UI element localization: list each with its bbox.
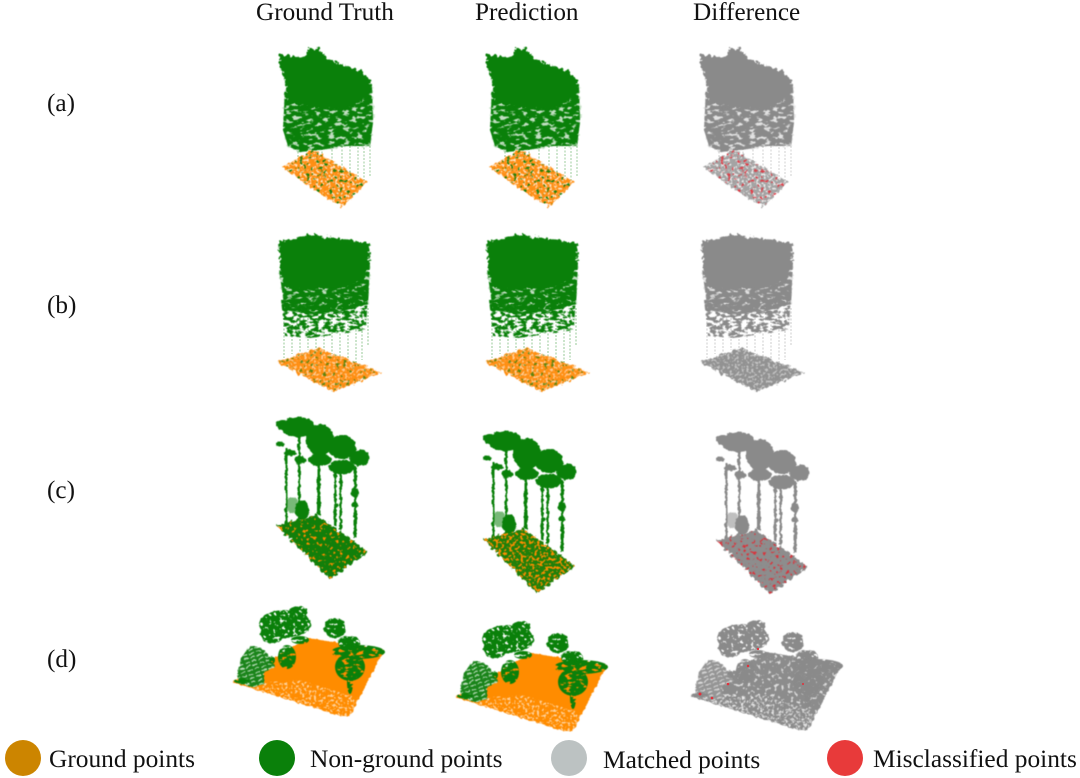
- row label (c): (c): [47, 477, 75, 504]
- row label (b): (b): [47, 292, 76, 319]
- legend item: ground points: [5, 740, 195, 776]
- legend: [5, 740, 1077, 776]
- point cloud: row a ground truth: [279, 48, 373, 206]
- legend item: non-ground points: Non-ground points: [310, 745, 503, 773]
- row label (a): (a): [47, 90, 75, 117]
- point cloud: row d difference: [690, 620, 843, 730]
- legend item: matched points: Matched points: [603, 746, 760, 774]
- point cloud: row c prediction: [483, 431, 577, 593]
- legend item: non-ground points: [259, 740, 503, 776]
- legend item: misclassified points: [827, 740, 1077, 776]
- point cloud: row d prediction: [455, 621, 608, 731]
- point cloud: row b prediction: [485, 234, 589, 392]
- point cloud: row a prediction: [486, 48, 580, 206]
- legend item: matched points: [551, 740, 760, 776]
- point cloud: row b ground truth: [277, 234, 381, 392]
- point cloud: row d ground truth: [232, 606, 385, 716]
- row label (d): (d): [47, 646, 76, 673]
- legend item: ground points: Ground points: [49, 745, 195, 773]
- point cloud: row b difference: [700, 234, 804, 392]
- legend item: misclassified points: Misclassified points: [873, 745, 1077, 773]
- point cloud: row c difference: [716, 432, 810, 594]
- point cloud: row c ground truth: [276, 417, 370, 579]
- point cloud: row a difference: [700, 48, 794, 206]
